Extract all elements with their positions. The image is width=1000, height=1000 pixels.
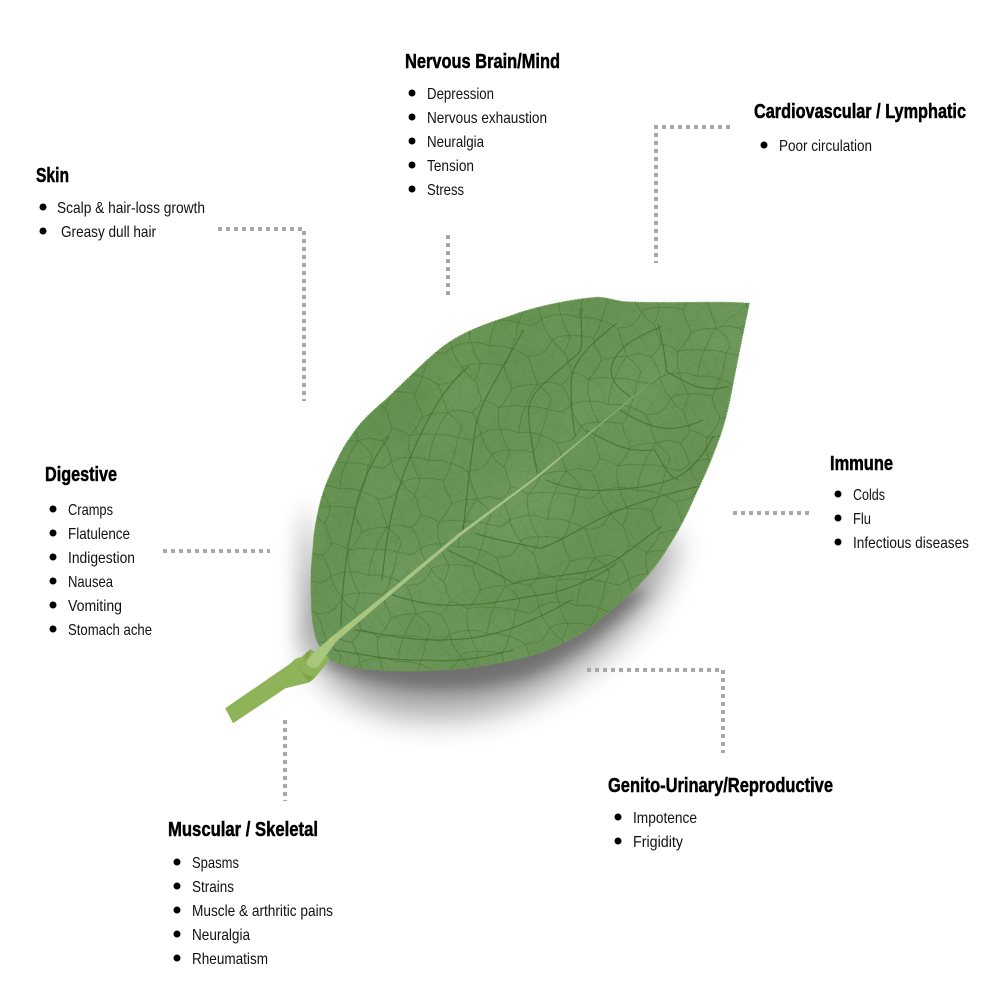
connector: digestive (163, 549, 270, 553)
connector: cardiovascular (656, 127, 730, 263)
midrib (306, 303, 749, 668)
panel: genito-urinary / reproductive (608, 775, 833, 851)
list: Flatulence (68, 526, 130, 543)
heading: Skin (36, 165, 69, 187)
list: Vomiting (68, 598, 122, 615)
list: Neuralgia (192, 927, 250, 944)
connector: skin (218, 229, 304, 401)
list: Indigestion (68, 550, 135, 567)
list: Neuralgia (427, 134, 484, 151)
list: Nausea (68, 574, 113, 591)
leaf blade (311, 297, 749, 671)
leaf shadow (296, 500, 680, 718)
leaf stem (225, 649, 331, 723)
panel: immune (830, 453, 969, 552)
list: Stomach ache (68, 622, 152, 639)
heading: Digestive (45, 464, 117, 486)
list (40, 200, 205, 241)
list: Muscle & arthritic pains (192, 903, 333, 920)
list (50, 502, 152, 639)
list: Colds (853, 487, 885, 504)
heading: Genito-Urinary/Reproductive (608, 775, 833, 797)
connector: muscular (283, 720, 287, 801)
list: Stress (427, 182, 464, 199)
leaf drawing (225, 293, 754, 723)
heading: Muscular / Skeletal (168, 819, 318, 841)
list (614, 810, 697, 851)
panel: nervous brain/mind (405, 51, 560, 199)
list: Greasy dull hair (61, 224, 157, 241)
connector: immune (733, 511, 810, 515)
list: Frigidity (633, 834, 683, 851)
list: Cramps (68, 502, 113, 519)
heading: Immune (830, 453, 893, 475)
list: Impotence (633, 810, 697, 827)
connector: genito-urinary (587, 670, 723, 753)
list (834, 487, 969, 552)
stem knot (299, 649, 314, 682)
connector: nervous (446, 235, 450, 295)
list: Nervous exhaustion (427, 110, 547, 127)
list: Poor circulation (779, 138, 872, 155)
heading: Nervous Brain/Mind (405, 51, 560, 73)
list: Tension (427, 158, 474, 175)
list: Strains (192, 879, 234, 896)
list: Depression (427, 86, 494, 103)
list: Spasms (192, 855, 239, 872)
panel: cardiovascular / lymphatic (754, 101, 966, 155)
list (174, 855, 333, 968)
panel: muscular / skeletal (168, 819, 333, 968)
list: Scalp & hair-loss growth (57, 200, 205, 217)
panel: digestive (45, 464, 152, 639)
list: Flu (853, 511, 871, 528)
list: Rheumatism (192, 951, 268, 968)
list: Infectious diseases (853, 535, 969, 552)
leaf texture and veins (306, 293, 754, 673)
panel: skin (36, 165, 205, 241)
leaf with drop shadow (225, 293, 754, 723)
list (408, 86, 547, 199)
